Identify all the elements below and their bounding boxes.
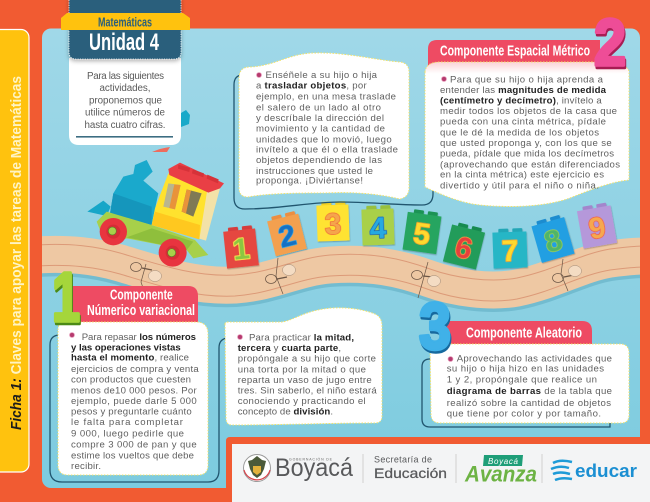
text block: realizó sobre la cantidad de objetos [447,398,611,409]
text block: reparta un vaso de jugo entre [238,375,372,386]
text block [71,332,199,472]
side tab [0,30,29,472]
text block: que usted proponga y, con los que se [440,138,612,149]
text block: en la cinta métrica) este ejercicio es [440,170,604,181]
text block: el salero de un lado al otro [256,102,381,113]
logo: educar: educar [575,460,637,481]
text block [256,70,398,187]
unit title: Unidad 4 [89,29,159,56]
text block: conociendo y practicando el [238,396,366,407]
text block: que le dé la medida de los objetos [440,128,599,139]
panel: activity box middle [225,308,382,425]
unit tab [61,0,190,145]
text block: objetos dependiendo de las [256,155,382,166]
number 1: 1 [52,258,80,336]
wooden track [36,244,646,301]
panel: activity box top [239,53,409,199]
brick 3: 3 [324,208,342,241]
brick 6 [443,221,486,270]
brick 1 [223,225,259,269]
text block [440,75,620,191]
text block: Para que su hijo o hija aprenda a [450,75,604,86]
text block: 9 000, luego pedirle que [71,429,184,440]
text block: unidades que lo movió, luego [256,134,392,145]
text block: divertido y útil para el niño o niña. [440,180,599,191]
logo: Secretaría de Educación [374,455,447,481]
connector line: component 1 to middle box [50,335,240,482]
logo: Boyacá: Boyacá [275,454,353,482]
text block: su hijo o hija hizo en las unidades [447,364,604,375]
heading: Componente Espacial Métrico [440,43,590,60]
text block: (centímetro y decímetro), invítelo a [440,96,602,107]
scattered toy pieces [152,110,190,152]
brick 8 [530,214,575,263]
brick 1: 1 [231,232,251,267]
bullet [70,333,74,337]
text block: con productos que cuesten [71,375,191,386]
text block [238,332,377,418]
heading: Componente [110,287,173,303]
text block: ejercicios de compra y venta [71,364,199,375]
bullet [257,73,261,77]
brick 4 [361,205,395,246]
text block: pueda con una cinta métrica, pídale [440,117,606,128]
text block: menos de10 000 pesos. Por [71,385,197,396]
header [428,40,600,66]
instruction card: proponemos que [89,96,163,106]
brick 7 [492,228,528,269]
instruction card: utilice números de [85,108,166,118]
number bricks [223,201,617,270]
text block: a trasladar objetos, por [256,81,367,92]
text block: pueda, pídale que mida los decímetros [440,149,614,160]
wheel [100,218,127,245]
toy train [87,160,224,267]
text block: y las operaciones vistas [71,343,181,354]
logo: Secretaría de Educación: Secretaría de [374,455,432,465]
brick 3 [316,201,350,242]
brick 6: 6 [452,230,476,266]
text block: invítelo a que él o ella traslade [256,144,398,155]
logo: Boyacá Avanza: Boyacá [488,457,519,466]
connector line: top box to component 2 [234,75,448,209]
text block: que tiene por color y por tamaño. [447,409,601,420]
text block: (aprovechando que están diferenciados [440,160,620,171]
side title: Ficha 1: Claves para apoyar las tareas de Matemáticas [9,76,25,430]
text block: 1 y 2, propóngale que realice un [447,375,597,386]
text block: Para practicar la mitad, [249,332,354,343]
panel: Componente Numérico variacional [52,258,208,475]
subject title: Matemáticas [98,16,152,30]
brick 2: 2 [275,218,299,254]
text block: hasta el momento, realice [71,353,189,364]
brick 5 [403,208,442,254]
text block: movimiento y la cantidad de [256,123,385,134]
panel: Componente Espacial Métrico [425,5,629,207]
text block: Enséñele a su hijo o hija [266,70,378,81]
number 3: 3 [419,289,451,363]
header [446,321,592,348]
text block: ejemplo, puede darle 5 000 [71,396,197,407]
bullet [238,335,242,339]
connector line: component 3 [422,359,610,427]
instruction card: actividades, [100,83,150,94]
text block: entender las magnitudes de medida [440,85,607,96]
text block: Aprovechando las actividades que [457,353,612,364]
instruction card: Para las siguientes [87,71,164,82]
text block: Para repasar los números [82,332,196,343]
text block: propóngale a su hijo que corte [238,354,376,365]
brick 4: 4 [369,212,387,245]
text block: estime los vueltos que debe [71,450,194,461]
instruction card [69,58,181,145]
brick 5: 5 [411,217,432,252]
text block: diagrama de barras de la tabla que [447,386,612,397]
brick 2 [266,210,307,256]
yellow band [61,13,190,30]
panel: Componente Aleatorio [419,289,629,423]
wheel [159,239,187,267]
text block: instrucciones que usted le [256,166,373,177]
text block: ejemplo, en una mesa traslade [256,91,396,102]
logo: Secretaría de Educación: Educación [374,465,447,481]
instruction card: hasta cuatro cifras. [84,120,166,131]
heading [87,287,195,319]
text block: y descríbale la dirección del [256,113,384,124]
bullet [442,77,446,81]
brick 7: 7 [501,235,519,268]
brick 9: 9 [586,211,608,246]
bullet [448,357,453,361]
text block: compre 3 000 de pan y que [71,439,197,450]
text block: tres. Sin saberlo, el niño estará [238,385,377,396]
heading: Componente Aleatorio [466,326,582,342]
text block: pesos y preguntarle cuánto [71,407,192,418]
text block: concepto de división. [238,407,333,418]
logo: Boyacá Avanza: Avanza [464,462,537,486]
footer logos [226,437,650,502]
text block [447,353,612,420]
heading: Númerico variacional [87,303,195,319]
logo: Boyacá: GOBERNACIÓN DE [289,456,333,462]
text block: proponga. ¡Diviértanse! [256,176,363,187]
dark unit label [69,0,181,59]
number 2: 2 [594,5,626,79]
text block: recibir. [71,461,101,472]
text block: tercera y cuarta parte, [238,343,341,354]
track joints [130,258,574,298]
brick 9 [576,202,617,249]
logo: Boyacá [244,454,353,482]
text block: medir todos los objetos de la casa que [440,106,617,117]
header [70,286,198,326]
text block: una torta por la mitad o que [238,364,366,375]
brick 8: 8 [541,223,566,260]
text block: le falta para completar [71,417,184,428]
